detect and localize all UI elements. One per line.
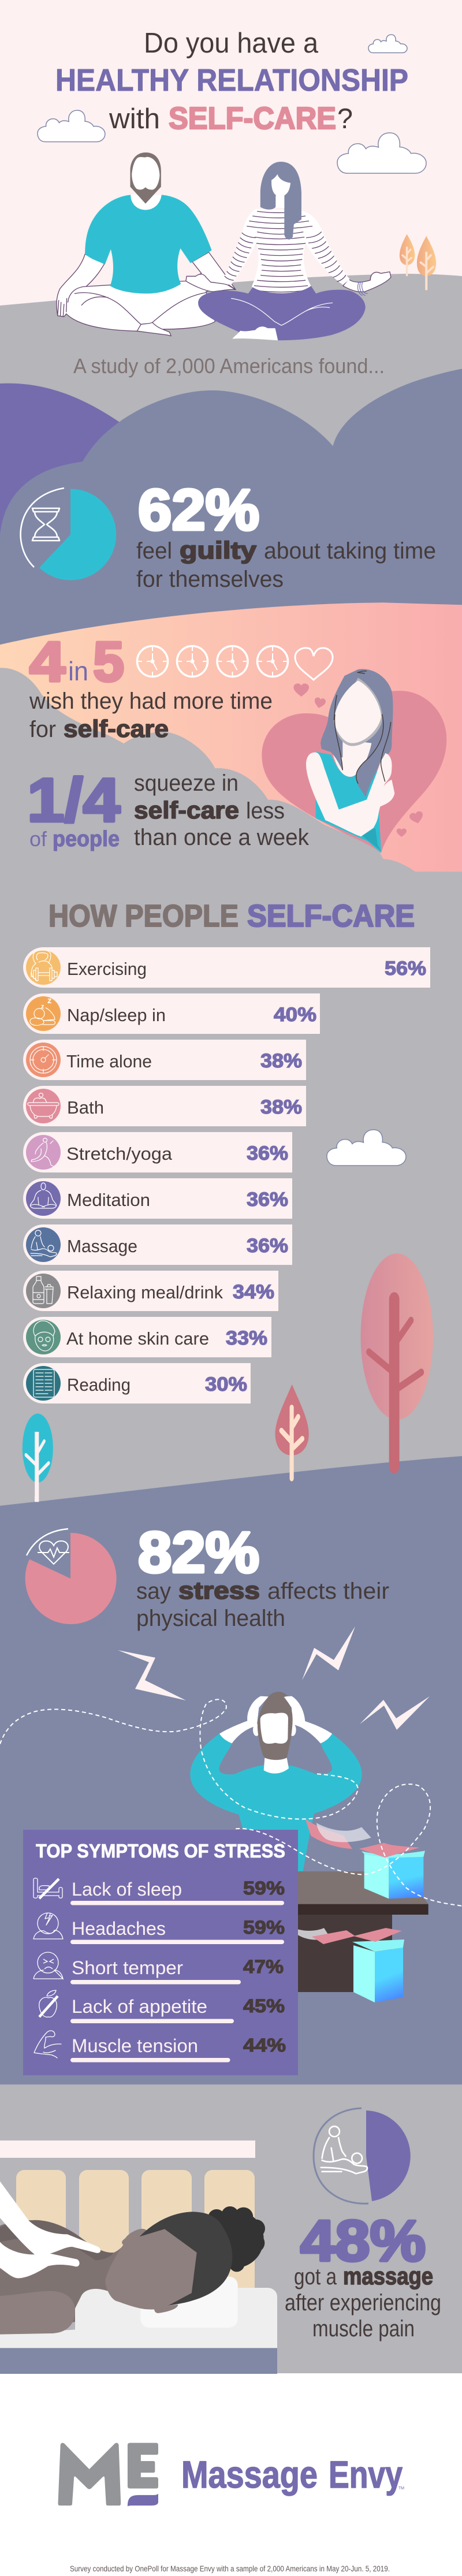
trees: pink, red and teal	[23, 1253, 433, 1502]
man: neck	[131, 195, 162, 210]
icon: outline heart	[295, 648, 333, 680]
bar: nap/sleep in 40%: z	[47, 996, 52, 1006]
stat: 4 in 5: self-care	[64, 715, 169, 742]
row: lack of sleep 59%: 59%	[243, 1878, 285, 1899]
bar: relaxing meal/drink 34%	[23, 1271, 278, 1311]
stat: 48% got a massage: 48%	[300, 2209, 426, 2273]
stat: 1/4 of people: self-care	[134, 796, 239, 824]
icon: 48% pie chart	[314, 2108, 411, 2203]
bar: stretch/yoga 36%	[23, 1132, 292, 1172]
bar: exercising 56%	[23, 947, 430, 988]
dashed line: upper swirl	[0, 1699, 358, 1819]
bar: meditation 36%	[23, 1178, 292, 1219]
cloud: top right small	[368, 35, 407, 53]
bar: bath 38%: Bath	[67, 1097, 104, 1118]
woman: face and neck	[271, 174, 290, 208]
illustration: meditating couple	[57, 152, 391, 340]
bar: meditation 36%: Meditation	[67, 1190, 150, 1210]
headboard rail	[0, 2141, 255, 2158]
lightning bolts	[118, 1626, 430, 1730]
bar: stretch/yoga 36%: 36%	[247, 1142, 288, 1164]
title	[55, 28, 408, 136]
peach band	[0, 602, 462, 872]
title: HEALTHY RELATIONSHIP	[55, 63, 408, 98]
bar: time alone 38%	[23, 1040, 306, 1080]
icon: orange trees	[400, 234, 436, 289]
bar: massage 36%: 36%	[247, 1235, 288, 1257]
bar: bath 38%	[23, 1086, 306, 1126]
woman: hair	[260, 162, 301, 240]
bar: massage 36%	[23, 1224, 292, 1265]
woman: neck	[333, 739, 371, 777]
massage therapist hands	[0, 2182, 100, 2278]
stat: 82% stress	[136, 1520, 389, 1631]
man: forearms	[219, 1696, 269, 1743]
woman: arms	[306, 753, 394, 836]
paper stack: lower	[288, 1926, 404, 2002]
woman: bracelets	[358, 281, 368, 296]
stat: 82% stress: physical health	[136, 1606, 285, 1631]
bar: time alone 38%: Time alone	[66, 1051, 152, 1071]
bar: at home skin care 33%: 33%	[226, 1327, 267, 1349]
chart: self-care bars	[23, 947, 430, 1404]
stat: 4 in 5: for	[29, 717, 56, 742]
bar: relaxing meal/drink 34%: 34%	[233, 1281, 274, 1303]
stat: 1/4 of people: less	[246, 798, 285, 824]
stat: 62% feel guilty: feel	[136, 538, 172, 564]
heading: how people self-care	[49, 899, 415, 933]
woman: hand right	[343, 272, 391, 292]
sky background	[0, 0, 462, 323]
stat: 1/4 of people: squeeze in	[134, 770, 239, 796]
bed mattress	[0, 2288, 277, 2348]
bed base	[0, 2348, 277, 2374]
row: headaches 59%: 59%	[243, 1917, 285, 1938]
gray foreground cloud	[0, 668, 462, 883]
illustration: stressed man at desk	[190, 1692, 429, 1915]
desk top	[293, 1871, 429, 1904]
dashed line: lower swirl	[236, 1784, 462, 1906]
stat: 48% got a massage: got a	[294, 2264, 337, 2290]
logo: Massage Envy wordmark: Massage	[181, 2453, 318, 2496]
woman: striped sweater	[222, 209, 350, 293]
subtitle: study: A study of 2,000 Americans found...	[73, 354, 385, 378]
title: Do you have a	[144, 28, 319, 59]
purple hill	[0, 384, 127, 578]
row: muscle tension 44%	[34, 2031, 286, 2062]
stat: 4 in 5: wish they had more time	[29, 688, 273, 714]
row: muscle tension 44%: Muscle tension	[72, 2035, 198, 2056]
row: lack of sleep 59%	[33, 1878, 285, 1905]
stat: 82% stress: say	[136, 1579, 171, 1604]
bar: exercising 56%: Exercising	[67, 959, 147, 979]
logo: Massage Envy wordmark: Envy	[329, 2453, 403, 2496]
cloud: beside chart	[327, 1130, 406, 1166]
stat: 48% got a massage	[285, 2209, 441, 2342]
teal tree trunk lower part	[35, 1496, 39, 1501]
icon: 62% pie chart	[21, 488, 116, 580]
blue stress section	[0, 1456, 462, 2084]
man: shirt	[85, 195, 212, 293]
stat: 82% stress: stress	[178, 1577, 260, 1604]
stat: 62% feel guilty: 62%	[138, 478, 259, 542]
cloud: left	[38, 110, 105, 142]
woman: sweater stripes	[225, 211, 346, 292]
woman: hand left	[186, 274, 236, 292]
bar: nap/sleep in 40%: 40%	[274, 1004, 316, 1026]
stat: 4 in 5: 4	[29, 630, 65, 693]
man: shirt	[190, 1734, 362, 1875]
title: SELF-CARE	[169, 101, 336, 136]
bar: reading 30%: Reading	[67, 1375, 131, 1395]
man: left hand fingers	[58, 299, 67, 317]
paper stack: upper	[364, 1854, 389, 1899]
desk body	[298, 1915, 392, 1992]
bar: massage 36%: Massage	[67, 1236, 137, 1256]
row: headaches 59%: Headaches	[72, 1918, 166, 1939]
bar: at home skin care 33%	[23, 1317, 271, 1357]
panel: top symptoms of stress	[23, 1830, 298, 2075]
title: with	[109, 103, 160, 135]
man: hair and beard	[130, 152, 161, 204]
woman: back hair	[321, 669, 393, 797]
row: muscle tension 44%: 44%	[243, 2035, 286, 2056]
stat: 62% feel guilty: guilty	[180, 537, 257, 564]
stat: 1/4 of people: people	[53, 827, 120, 851]
stat: 62% feel guilty: for themselves	[136, 567, 284, 592]
pillow	[140, 2277, 238, 2328]
stat: 62% feel guilty: about taking time	[264, 538, 436, 564]
bar: nap/sleep in 40%: Nap/sleep in	[67, 1005, 166, 1025]
head	[106, 2229, 197, 2313]
bar: relaxing meal/drink 34%: Relaxing meal/drink	[67, 1282, 223, 1302]
stat: 4 in 5: 5	[93, 630, 124, 693]
body	[0, 2220, 127, 2335]
woman: front hair	[356, 714, 392, 797]
stat: 4 in 5: in	[68, 656, 88, 686]
shoulder shade	[0, 2220, 114, 2260]
woman: face	[334, 680, 381, 743]
row: short temper 47%: 47%	[243, 1956, 284, 1977]
icon: heart with pulse	[38, 1541, 69, 1564]
bar: exercising 56%: 56%	[385, 958, 426, 980]
man: face	[260, 1713, 288, 1744]
man: leg lines	[68, 286, 206, 331]
bar: reading 30%: 30%	[205, 1373, 247, 1395]
small hearts	[293, 683, 424, 837]
woman: hair strands	[334, 671, 391, 784]
icon: hourglass	[32, 508, 59, 541]
woman: foot	[232, 326, 278, 340]
stat: 4 in 5	[29, 630, 273, 742]
bar: at home skin care 33%: At home skin care	[66, 1328, 209, 1349]
row: short temper 47%: Short temper	[72, 1957, 183, 1978]
bar: stretch/yoga 36%: Stretch/yoga	[66, 1144, 173, 1164]
illustration: woman hugging herself with heart	[262, 669, 446, 853]
man: neck	[264, 1758, 289, 1774]
bar: time alone 38%: 38%	[260, 1050, 302, 1072]
footer: survey source: Survey conducted by OnePoll for Massage Envy with a sample of 2,000 Americans in May 20-Jun. 5, 2019.	[70, 2564, 390, 2573]
desk front	[293, 1904, 429, 1915]
row: lack of appetite 45%	[39, 1990, 285, 2023]
woman: face shadow	[334, 677, 382, 746]
flying papers	[305, 1818, 352, 1849]
logo: Massage Envy wordmark: TM	[398, 2486, 404, 2491]
row: short temper 47%	[33, 1952, 284, 1985]
row: lack of sleep 59%: Lack of sleep	[72, 1879, 182, 1900]
hair bun	[206, 2206, 265, 2272]
stat: 1/4 of people: 1/4	[27, 765, 120, 835]
arm	[0, 2291, 75, 2335]
bar: nap/sleep in 40%: z	[41, 1003, 44, 1010]
stat: 48% got a massage: massage	[343, 2262, 433, 2290]
stat: 1/4 of people	[27, 765, 310, 851]
stat: 48% got a massage: muscle pain	[312, 2316, 415, 2342]
stat: 82% stress: affects their	[267, 1579, 389, 1604]
icon: 82% pie chart	[25, 1529, 117, 1624]
stat: 62% feel guilty	[136, 478, 436, 592]
headboard slats	[16, 2170, 255, 2297]
big heart	[262, 691, 446, 853]
heading: how people self-care: SELF-CARE	[247, 899, 415, 933]
icon: four clocks	[137, 646, 288, 677]
man: legs and arms	[57, 252, 236, 336]
row: lack of appetite 45%: Lack of appetite	[72, 1996, 207, 2017]
blue-gray cloud section	[0, 369, 462, 707]
woman: pants	[198, 286, 366, 340]
hair	[140, 2212, 232, 2306]
woman: pant crease lines	[231, 299, 333, 325]
title: ?	[337, 103, 353, 135]
icon: massage	[321, 2127, 367, 2173]
stat: 1/4 of people: than once a week	[134, 825, 310, 850]
logo: ME mark	[58, 2443, 158, 2507]
bar: reading 30%	[23, 1363, 251, 1404]
stat: 82% stress: 82%	[138, 1520, 259, 1585]
row: headaches 59%	[33, 1913, 285, 1944]
panel heading: TOP SYMPTOMS OF STRESS	[36, 1840, 285, 1862]
man: hair and beard	[258, 1692, 293, 1760]
illustration: woman receiving massage	[0, 2182, 277, 2374]
heading: how people self-care: HOW PEOPLE	[49, 899, 239, 933]
stat: 1/4 of people: of	[29, 827, 47, 851]
man: face	[132, 157, 159, 189]
row: lack of appetite 45%: 45%	[243, 1996, 285, 2016]
cloud: right large	[337, 133, 426, 173]
woman: top	[316, 752, 381, 853]
bar: bath 38%: 38%	[260, 1096, 302, 1118]
bar: nap/sleep in 40%	[23, 993, 320, 1034]
bar: meditation 36%: 36%	[247, 1189, 288, 1211]
